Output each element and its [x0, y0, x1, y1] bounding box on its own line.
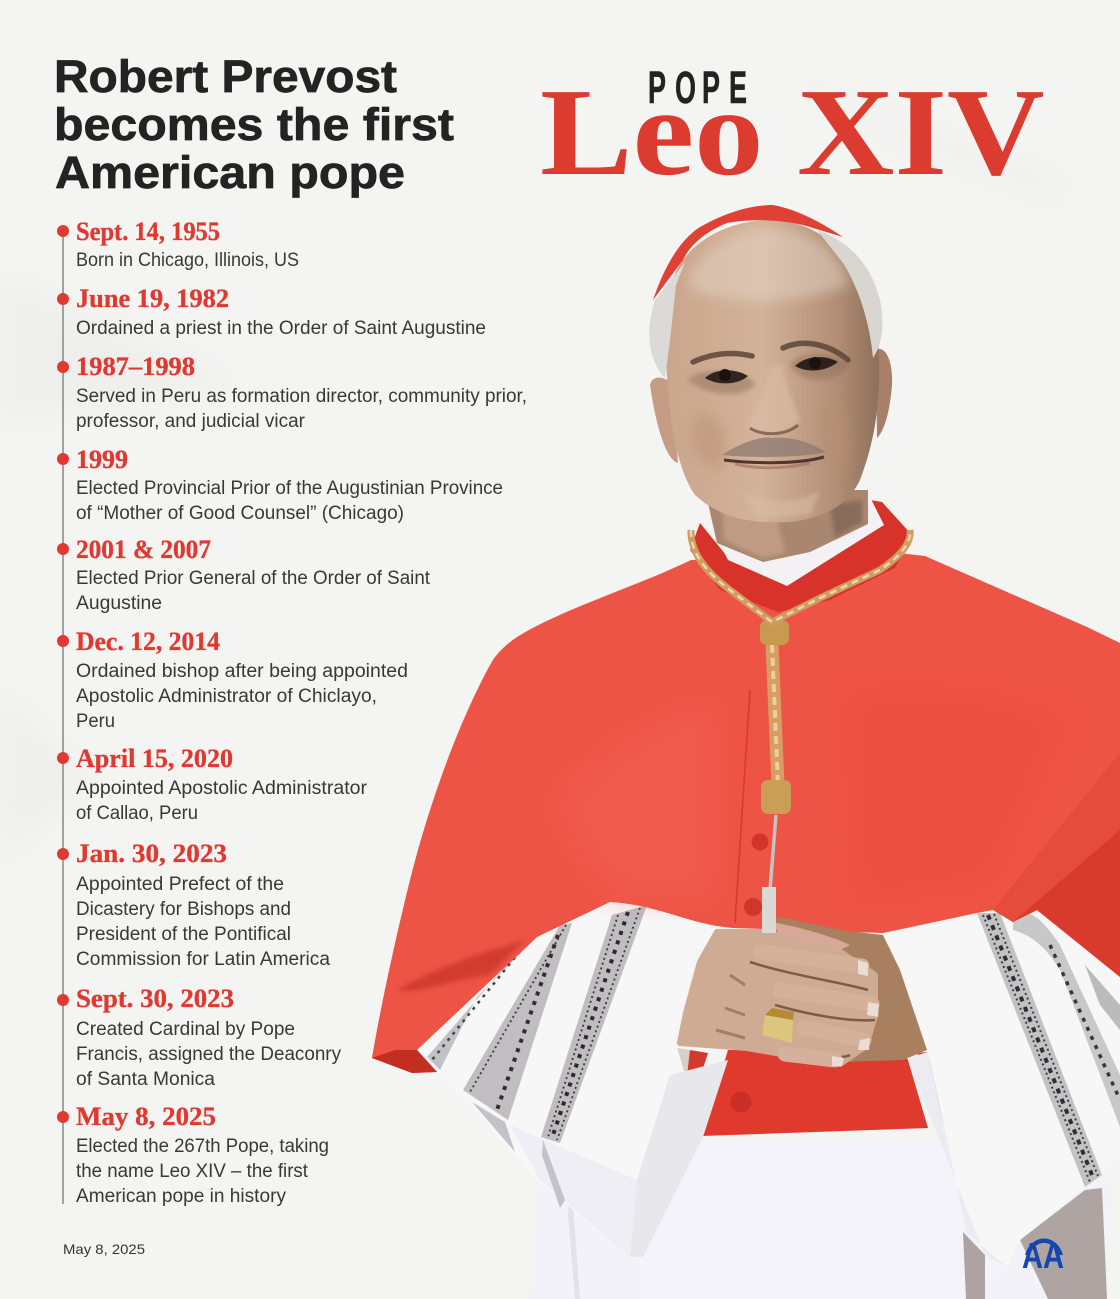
timeline — [57, 217, 527, 1207]
clasped hands — [680, 917, 927, 1066]
entry: 1987–1998 — [57, 352, 527, 432]
entry: 1999: 1999 — [76, 445, 128, 474]
entry: April 15, 2020: April 15, 2020 — [76, 744, 233, 773]
entry: 1987–1998: professor, and judicial vicar — [76, 411, 306, 432]
entry: Dec. 12, 2014: Peru — [76, 711, 115, 732]
left lace bands — [541, 905, 647, 1143]
entry: Dec. 12, 2014: Dec. 12, 2014 — [76, 627, 220, 656]
entry: Dec. 12, 2014: Ordained bishop after being appointed — [76, 661, 408, 682]
white alb — [530, 1140, 1110, 1299]
entry: Jan. 30, 2023: Jan. 30, 2023 — [76, 839, 227, 868]
neck — [705, 490, 868, 562]
knuckle marks — [716, 975, 745, 1038]
masthead: Pope Leo XIV — [540, 62, 1044, 202]
entry: 2001 & 2007: Augustine — [76, 593, 162, 614]
mouth — [724, 457, 824, 463]
eye sockets — [688, 354, 850, 394]
entry: April 15, 2020: Appointed Apostolic Administrator — [76, 778, 368, 799]
entry: Jan. 30, 2023 — [57, 839, 330, 970]
eyes — [705, 370, 748, 383]
entry: Sept. 30, 2023: Francis, assigned the Deaconry — [76, 1044, 341, 1065]
right lace bands — [977, 913, 1102, 1187]
entry: June 19, 1982: Ordained a priest in the Order of Saint Augustine — [76, 318, 486, 339]
masthead: Pope Leo XIV: XIV — [797, 64, 1044, 202]
entry: May 8, 2025: the name Leo XIV – the first — [76, 1161, 309, 1182]
entry: 1987–1998: 1987–1998 — [76, 352, 195, 381]
entry: Jan. 30, 2023: Commission for Latin America — [76, 949, 330, 970]
entry: 1999 — [57, 445, 503, 524]
left sleeve — [417, 902, 735, 1257]
entry: Sept. 14, 1955: Sept. 14, 1955 — [76, 217, 220, 246]
entry: Sept. 14, 1955 — [57, 217, 299, 271]
title: American pope — [55, 147, 405, 198]
nose — [747, 365, 800, 434]
entry: June 19, 1982: June 19, 1982 — [76, 284, 229, 313]
entry: 1987–1998: Served in Peru as formation director, community prior, — [76, 386, 527, 407]
entry: April 15, 2020 — [57, 744, 368, 824]
masthead: Pope Leo XIV: POPE — [648, 62, 747, 113]
entry: May 8, 2025 — [57, 1102, 329, 1207]
icon: Anadolu Agency logo: AA — [1022, 1235, 1064, 1276]
publication date: May 8, 2025 — [63, 1241, 145, 1257]
entry: 1999: of “Mother of Good Counsel” (Chicago) — [76, 503, 404, 524]
entry: Jan. 30, 2023: Appointed Prefect of the — [76, 874, 284, 895]
gold ring — [762, 1015, 793, 1043]
entry: 2001 & 2007: Elected Prior General of the Order of Saint — [76, 568, 431, 589]
entry: June 19, 1982 — [57, 284, 486, 339]
entry: Sept. 30, 2023: Created Cardinal by Pope — [76, 1019, 295, 1040]
grey hair — [649, 262, 685, 378]
entry: Sept. 30, 2023: of Santa Monica — [76, 1069, 215, 1090]
masthead: Pope Leo XIV: Leo — [540, 62, 764, 201]
entry: May 8, 2025: Elected the 267th Pope, taking — [76, 1136, 329, 1157]
finger creases — [750, 962, 875, 1057]
portrait of Pope Leo XIV — [372, 205, 1120, 1299]
red cape — [372, 553, 1120, 1073]
ears — [650, 378, 678, 463]
title — [54, 51, 454, 198]
entry: Dec. 12, 2014: Apostolic Administrator of Chiclayo, — [76, 686, 377, 707]
red sash with button — [648, 1047, 963, 1143]
moustache — [722, 438, 826, 457]
entry: April 15, 2020: of Callao, Peru — [76, 803, 198, 824]
right sleeve — [880, 912, 1120, 1267]
title: Robert Prevost — [54, 51, 397, 102]
entry: Sept. 14, 1955: Born in Chicago, Illinois, US — [76, 250, 299, 271]
entry: May 8, 2025: American pope in history — [76, 1186, 286, 1207]
head — [649, 205, 892, 522]
pectoral cord with knots and cross — [760, 620, 791, 933]
fingernails — [832, 960, 879, 1066]
entry: 2001 & 2007 — [57, 535, 431, 614]
entry: Jan. 30, 2023: President of the Pontifical — [76, 924, 291, 945]
entry: Jan. 30, 2023: Dicastery for Bishops and — [76, 899, 291, 920]
title: becomes the first — [54, 99, 454, 150]
entry: Dec. 12, 2014 — [57, 627, 408, 732]
gold braid — [691, 530, 910, 622]
entry: Sept. 30, 2023 — [57, 984, 341, 1090]
cape shading folds — [993, 753, 1120, 977]
entry: Sept. 30, 2023: Sept. 30, 2023 — [76, 984, 234, 1013]
red zucchetto — [653, 205, 843, 300]
entry: May 8, 2025: May 8, 2025 — [76, 1102, 216, 1131]
collar — [690, 490, 912, 622]
entry: 1999: Elected Provincial Prior of the Augustinian Province — [76, 478, 503, 499]
entry: 2001 & 2007: 2001 & 2007 — [76, 535, 211, 564]
eyebrows — [693, 343, 848, 362]
